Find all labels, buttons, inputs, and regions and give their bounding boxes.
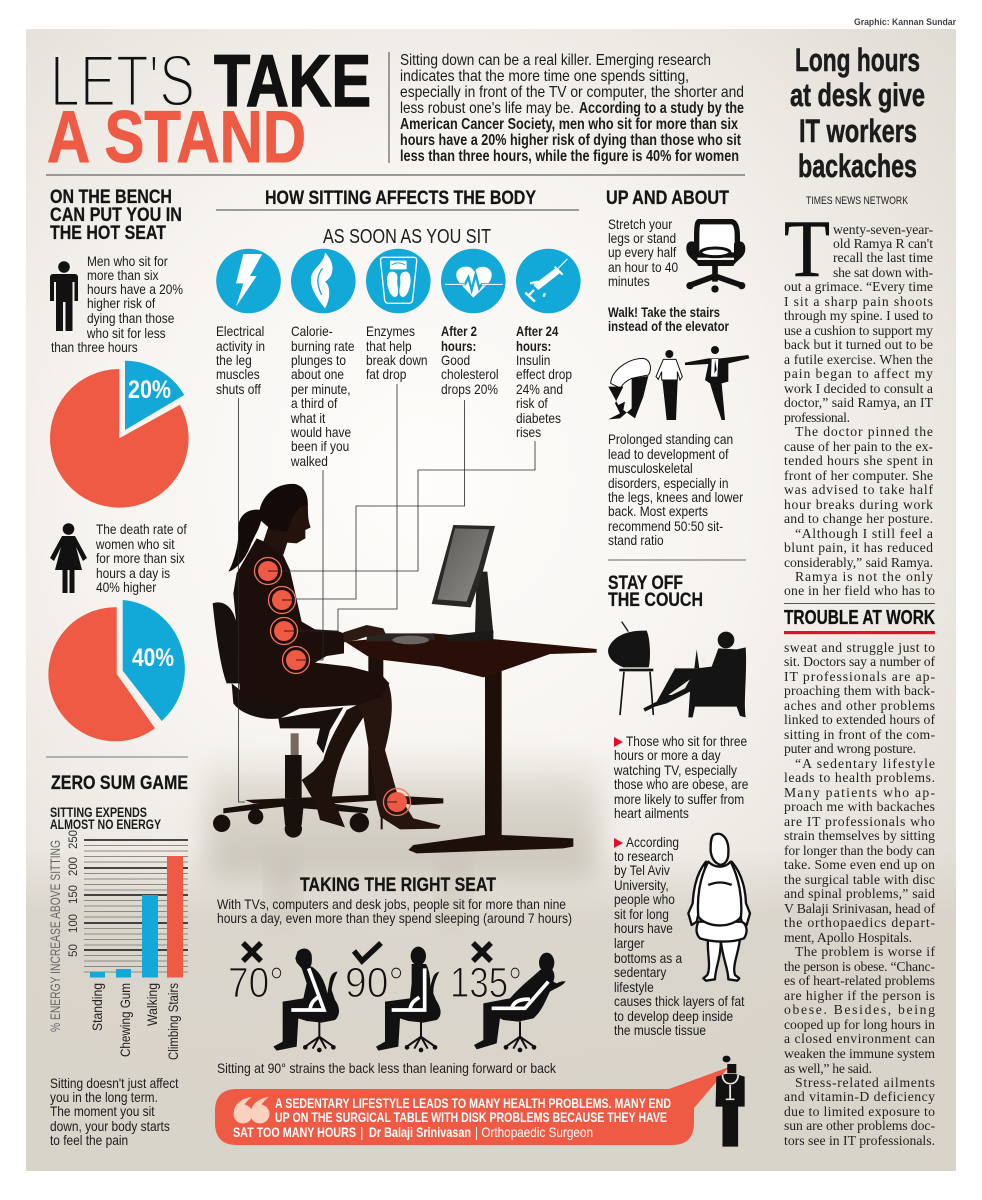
chart title <box>50 805 161 832</box>
icon: doctor <box>716 1056 745 1147</box>
bar chart: Chewing Gum <box>117 983 133 1057</box>
caption: after 2 hours: After 2 <box>441 324 477 339</box>
text: stretch: an hour to 40 <box>608 259 678 275</box>
article text: part two: the surgical table with disc <box>784 872 935 887</box>
caption: after 24 hours: effect drop <box>516 366 572 382</box>
article text: part one: Ramya is not the only <box>795 569 933 584</box>
text: long term: The moment you sit <box>50 1103 155 1119</box>
article text: part one <box>784 222 935 598</box>
text: seat intro: With TVs, computers and desk jobs, people sit for more than nine <box>217 897 566 912</box>
article text: part two: sitting in front of the com- <box>784 727 935 742</box>
article text: part two: strain themselves by sitting <box>784 828 935 843</box>
heading: stay off the couch: STAY OFF <box>608 573 683 594</box>
text: women: hours a day is <box>96 565 170 581</box>
pie chart: men 20% <box>50 361 189 508</box>
caption: enzymes <box>366 323 428 382</box>
text: men: who sit for less <box>86 325 166 341</box>
panel: stay off the couch <box>608 573 750 1038</box>
caption: after 2 hours <box>441 324 499 397</box>
text: stretch: legs or stand <box>608 230 676 246</box>
caption: calorie burning: would have <box>290 424 351 440</box>
speech bubble <box>215 1067 729 1145</box>
caption: after 2 hours: cholesterol <box>441 366 499 382</box>
article text: part two: the person is obese. “Chanc- <box>784 959 935 974</box>
caption: electrical activity: shuts off <box>216 381 261 397</box>
caption: electrical activity: Electrical <box>216 323 264 339</box>
text: men: higher risk of <box>87 295 156 311</box>
text: tel aviv research: sedentary <box>614 964 667 980</box>
article text: part two: ment, Apollo Hospitals. <box>784 930 912 945</box>
text: prolonged standing <box>608 431 744 548</box>
article text: part two: the orthopaedics depart- <box>784 915 935 930</box>
text: tel aviv research: to develop deep inside <box>614 1008 733 1024</box>
icon: lightning bolt <box>216 249 281 313</box>
quote text <box>233 1096 671 1140</box>
article text: part one: hour breaks during work <box>784 497 933 512</box>
article text: part one: one in her field who has to <box>784 583 935 598</box>
angle: 135 degrees wrong: 135° <box>450 959 522 1007</box>
icon: office chair <box>686 222 745 293</box>
quote text: UP ON THE SURGICAL TABLE WITH DISK PROBLEMS BECAUSE THEY HAVE <box>275 1110 667 1125</box>
caption: electrical activity: activity in <box>216 338 265 354</box>
article text: part one: back but it turned out to be <box>784 337 933 352</box>
bar chart: 200 <box>66 857 80 876</box>
subheading: as soon as you sit: AS SOON AS YOU SIT <box>323 226 491 248</box>
bar chart <box>48 830 188 1060</box>
text: men: dying than those <box>87 310 174 326</box>
byline: TIMES NEWS NETWORK <box>806 195 909 207</box>
text: seat intro <box>217 897 572 926</box>
text: tv hours <box>613 733 748 821</box>
article text: part two: as well,” he said. <box>784 1061 872 1076</box>
article text: part two: and spinal problems,” said <box>784 886 935 901</box>
text: men <box>51 253 183 355</box>
text: tel aviv research: University, <box>614 877 669 893</box>
text: men: than three hours <box>51 339 138 355</box>
icon: quotation marks <box>234 1097 270 1124</box>
article text: part two: sweat and struggle just to <box>784 640 935 655</box>
article headline: backaches <box>798 148 917 184</box>
intro text: less than three hours, while the figure is 40% for women <box>400 148 739 165</box>
bar chart: 100 <box>66 914 80 933</box>
angle: 70 degrees wrong: 70° <box>228 959 284 1007</box>
caption: after 24 hours: 24% and <box>516 381 563 397</box>
bar chart: % ENERGY INCREASE ABOVE SITTING <box>48 840 63 1032</box>
caption: calorie burning: Calorie- <box>291 323 333 339</box>
icon: heart with pulse <box>441 249 506 313</box>
heading: zero sum game: ZERO SUM GAME <box>51 773 188 794</box>
article text: part one: cause of her pain to the ex- <box>784 439 933 454</box>
pie chart: women 40%: 40% <box>132 644 174 672</box>
article text: part one: wenty-seven-year- <box>833 222 933 237</box>
text: men: more than six <box>87 267 159 283</box>
heading: how sitting affects the body: HOW SITTING AFFECTS THE BODY <box>265 188 536 209</box>
intro text: less robust one's life may be. <box>400 100 574 117</box>
caption: electrical activity <box>216 323 265 397</box>
article text: part one: blunt pain, it has reduced <box>784 540 933 555</box>
article text: part one: was advised to take half <box>784 482 933 497</box>
icon: syringe <box>516 249 581 313</box>
text: stretch <box>608 216 678 289</box>
subheading: walk: instead of the elevator <box>608 319 730 334</box>
text: long term <box>50 1075 179 1148</box>
quote text: SAT TOO MANY HOURS <box>233 1125 356 1140</box>
text: tel aviv research: lifestyle <box>614 979 654 995</box>
intro text <box>400 52 744 165</box>
text: tel aviv research <box>614 834 745 1038</box>
caption: calorie burning: a third of <box>291 395 338 411</box>
caption: after 24 hours: rises <box>516 424 541 440</box>
article text: part two: for longer than the body can <box>784 843 935 858</box>
text: women: women who sit <box>95 536 175 552</box>
text: tel aviv research: people who <box>614 891 675 907</box>
article text: part two: weaken the immune system <box>784 1046 935 1061</box>
angle: 90 degrees correct <box>345 943 441 1052</box>
caption: calorie burning: about one <box>291 366 344 382</box>
article headline: at desk give <box>790 77 925 113</box>
panel: taking the right seat <box>217 875 572 1076</box>
intro text: especially in front of the TV or computer, the shorter and <box>400 84 744 101</box>
caption: after 2 hours: Good <box>441 352 470 368</box>
article text: part two: and vitamin-D deficiency <box>784 1089 935 1104</box>
article text: part one: recall the last time <box>833 250 933 265</box>
caption: after 2 hours: hours: <box>441 339 476 354</box>
bar chart: Climbing Stairs <box>165 983 181 1060</box>
caption: electrical activity: muscles <box>216 366 260 382</box>
caption: calorie burning: walked <box>290 453 328 469</box>
text: tel aviv research: to research <box>614 848 674 864</box>
subheading: trouble at work <box>784 604 935 634</box>
subheading: walk <box>608 305 730 334</box>
heading: on the bench: CAN PUT YOU IN <box>50 205 182 226</box>
article text: part two: take. Some even end up on <box>784 857 935 872</box>
article text: part two: a closed environment can <box>784 1031 935 1046</box>
chart title: SITTING EXPENDS <box>50 805 147 820</box>
caption: after 24 hours: diabetes <box>516 410 561 426</box>
pie chart: men 20%: 20% <box>128 376 171 404</box>
caption: after 24 hours <box>516 324 572 440</box>
angle: 70 degrees wrong <box>228 943 339 1052</box>
desk <box>245 633 597 853</box>
connector lines <box>238 384 535 802</box>
drop cap: T <box>784 203 830 294</box>
article text: part two: sit. Doctors say a number of <box>784 654 935 669</box>
article text: part two: Stress-related ailments <box>795 1075 935 1090</box>
text: prolonged standing: disorders, especially in <box>608 475 728 491</box>
bar chart: 250 <box>66 830 80 849</box>
text: tel aviv research: hours have <box>614 920 673 936</box>
icon: overweight figure <box>688 834 750 981</box>
text: tel aviv research: larger <box>614 935 645 951</box>
article text: part one: she sat down with- <box>833 265 933 280</box>
article text: part one: old Ramya R can't <box>833 236 933 251</box>
text: tel aviv research: According <box>626 834 679 850</box>
text: tel aviv research: sit for long <box>614 906 669 922</box>
text: women <box>95 521 187 595</box>
intro text: According to a study by the <box>579 100 744 117</box>
body markers <box>254 558 410 816</box>
text: stretch: up every half <box>608 244 677 260</box>
article text: part two: Many patients who ap- <box>784 785 935 800</box>
article text: part one: front of her computer. She <box>784 468 933 483</box>
article text: part one: and to change her posture. <box>784 511 933 526</box>
text: tv hours: those who are obese, are <box>614 776 748 792</box>
caption: calorie burning <box>290 323 355 469</box>
article text: part two: linked to extended hours of <box>784 712 935 727</box>
article text: part two: “A sedentary lifestyle <box>795 756 935 771</box>
heading: on the bench: ON THE BENCH <box>50 187 172 208</box>
article text: part two: IT professionals are ap- <box>784 669 935 684</box>
article text: part two: tors see in IT professionals. <box>784 1133 935 1148</box>
article text: part one: tended hours she spent in <box>784 453 933 468</box>
text: tel aviv research: causes thick layers of fat <box>614 993 745 1009</box>
chair <box>213 602 369 838</box>
text: prolonged standing: recommend 50:50 sit- <box>608 518 723 534</box>
article headline: IT workers <box>799 113 917 149</box>
text: men: hours have a 20% <box>87 281 183 297</box>
subheading: walk: Walk! Take the stairs <box>608 305 720 320</box>
article text: part one: use a cushion to support my <box>784 323 933 338</box>
text: tv hours: watching TV, especially <box>613 762 738 778</box>
title <box>47 41 371 178</box>
icon: scale and feet <box>366 249 431 313</box>
text: prolonged standing: musculoskeletal <box>608 460 693 476</box>
icon: man <box>50 261 78 331</box>
article text: part one: pain began to affect my <box>784 366 933 381</box>
heading: up and about: UP AND ABOUT <box>606 188 729 209</box>
article headline: Long hours <box>795 42 920 78</box>
caption: after 24 hours: risk of <box>516 395 548 411</box>
quote text: | <box>360 1125 364 1140</box>
bar chart: 50 <box>66 944 80 957</box>
bar chart: Standing <box>89 983 105 1031</box>
bar chart: Walking <box>144 983 160 1026</box>
article text: part two: cooped up for long hours in <box>784 1017 935 1032</box>
article text: part one: work I decided to consult a <box>784 381 933 396</box>
text: long term: Sitting doesn't just affect <box>50 1075 179 1091</box>
text: long term: down, your body starts <box>50 1118 170 1134</box>
caption: after 24 hours: After 24 <box>516 324 558 339</box>
article text: part one: professional. <box>784 410 850 425</box>
article text: part two <box>784 640 935 1148</box>
caption: calorie burning: been if you <box>291 438 349 454</box>
panel: on the bench <box>48 187 189 741</box>
icon: tv and couch viewer <box>608 622 746 717</box>
heading: stay off the couch <box>608 573 703 611</box>
panel: up and about <box>606 188 749 548</box>
angle: 90 degrees correct: 90° <box>345 959 404 1007</box>
article text: part two: are IT professionals who <box>784 814 935 829</box>
quote text: | Orthopaedic Surgeon <box>475 1125 593 1140</box>
chart title: ALMOST NO ENERGY <box>50 817 161 832</box>
pie chart: women 40% <box>48 600 185 741</box>
text: tel aviv research: by Tel Aviv <box>614 862 670 878</box>
angle: 135 degrees wrong <box>450 943 566 1052</box>
article headline <box>790 42 925 184</box>
article text: part one: I sit a sharp pain shoots <box>784 294 933 309</box>
woman silhouette <box>228 484 441 829</box>
text: tv hours: Those who sit for three <box>626 733 747 749</box>
text: long term: you in the long term. <box>50 1089 158 1105</box>
article text: part two: due to limited exposure to <box>784 1104 935 1119</box>
quote text: A SEDENTARY LIFESTYLE LEADS TO MANY HEALTH PROBLEMS. MANY END <box>275 1096 671 1111</box>
caption: calorie burning: per minute, <box>291 381 351 397</box>
article text: part two: leads to health problems. <box>784 770 935 785</box>
text: women: 40% higher <box>96 579 157 595</box>
caption: enzymes: Enzymes <box>366 323 415 339</box>
caption: calorie burning: burning rate <box>291 338 355 354</box>
article column <box>784 203 935 1148</box>
article text: part one: “Although I still feel a <box>795 526 933 541</box>
caption: after 24 hours: Insulin <box>516 352 550 368</box>
article text: part two: es of heart-related problems <box>784 973 935 988</box>
quote callout <box>215 1056 745 1147</box>
article text: part two: proach me with backaches <box>784 799 935 814</box>
text: stretch: minutes <box>608 273 650 289</box>
article text: part two: proaching them with back- <box>784 683 935 698</box>
caption: enzymes: that help <box>366 338 412 354</box>
text: prolonged standing: back. Most experts <box>608 503 708 519</box>
icon captions <box>216 323 572 469</box>
credit line: Graphic: Kannan Sundar <box>854 17 956 28</box>
article text: part two: puter and wrong posture. <box>784 741 916 756</box>
subheading: trouble at work: TROUBLE AT WORK <box>784 607 935 629</box>
text: seat intro: hours a day, even more than they spend sleeping (around 7 hours) <box>217 911 572 926</box>
title: LET'S <box>50 41 195 122</box>
caption: enzymes: fat drop <box>366 366 406 382</box>
panel: how sitting affects the body <box>213 188 597 853</box>
text: long term: to feel the pain <box>50 1132 128 1148</box>
article text: part two: are higher if the person is <box>784 988 935 1003</box>
title: TAKE <box>214 41 371 122</box>
text: prolonged standing: the legs, knees and lower <box>608 489 744 505</box>
text: tv hours: heart ailments <box>614 805 689 821</box>
icon: flame <box>291 249 356 313</box>
icon: woman <box>50 523 87 593</box>
article text: part one: considerably,” said Ramya. <box>784 555 933 570</box>
illustration: woman at desk silhouette <box>213 484 597 853</box>
icon: stretching figures <box>608 346 749 420</box>
text: women: for more than six <box>96 550 185 566</box>
text: tv hours: more likely to suffer from <box>614 791 744 807</box>
heading: taking the right seat: TAKING THE RIGHT SEAT <box>300 875 496 896</box>
article text: part two: aches and other problems <box>784 698 935 713</box>
text: women: The death rate of <box>96 521 187 537</box>
intro text: American Cancer Society, men who sit for more than six <box>400 116 738 133</box>
heading: on the bench: THE HOT SEAT <box>50 223 166 244</box>
title: A STAND <box>47 97 306 178</box>
caption: calorie burning: what it <box>290 410 326 426</box>
text: stretch: Stretch your <box>608 216 673 232</box>
intro text: Sitting down can be a real killer. Emerging research <box>400 52 711 69</box>
text: tv hours: hours or more a day <box>614 747 721 763</box>
text: tel aviv research: bottoms as a <box>614 950 683 966</box>
text: prolonged standing: stand ratio <box>608 532 664 548</box>
article text: part two: V Balaji Srinivasan, head of <box>784 901 935 916</box>
intro text: hours have a 20% higher risk of dying than those who sit <box>400 132 741 149</box>
bar chart: 150 <box>66 885 80 904</box>
caption: after 24 hours: hours: <box>516 339 551 354</box>
text: men: Men who sit for <box>87 253 168 269</box>
article text: part one: a futile exercise. When the <box>784 352 933 367</box>
article text: part two: sun are other problems doc- <box>784 1118 935 1133</box>
monitor <box>432 525 495 641</box>
heading: stay off the couch: THE COUCH <box>608 590 703 611</box>
article text: part one: The doctor pinned the <box>795 424 933 439</box>
text: tel aviv research: the muscle tissue <box>614 1022 706 1038</box>
panel: zero sum game <box>48 773 188 1148</box>
text: prolonged standing: lead to development of <box>608 446 729 462</box>
article text: part one: out a grimace. “Every time <box>784 279 933 294</box>
text: prolonged standing: Prolonged standing can <box>608 431 733 447</box>
heading: on the bench <box>50 187 182 244</box>
caption: enzymes: break down <box>366 352 428 368</box>
article text: part one: through my spine. I used to <box>784 308 933 323</box>
caption: after 2 hours: drops 20% <box>441 381 498 397</box>
caption: calorie burning: plunges to <box>291 352 346 368</box>
intro text: indicates that the more time one spends sitting, <box>400 68 689 85</box>
article text: part two: obese. Besides, being <box>784 1002 935 1017</box>
article text: part one: doctor,” said Ramya, an IT <box>784 395 934 410</box>
quote text: Dr Balaji Srinivasan <box>369 1125 471 1140</box>
caption: sitting at 90: Sitting at 90° strains the back less than leaning forward or back <box>217 1061 556 1076</box>
article text: part two: The problem is worse if <box>795 944 935 959</box>
caption: electrical activity: the leg <box>216 352 252 368</box>
